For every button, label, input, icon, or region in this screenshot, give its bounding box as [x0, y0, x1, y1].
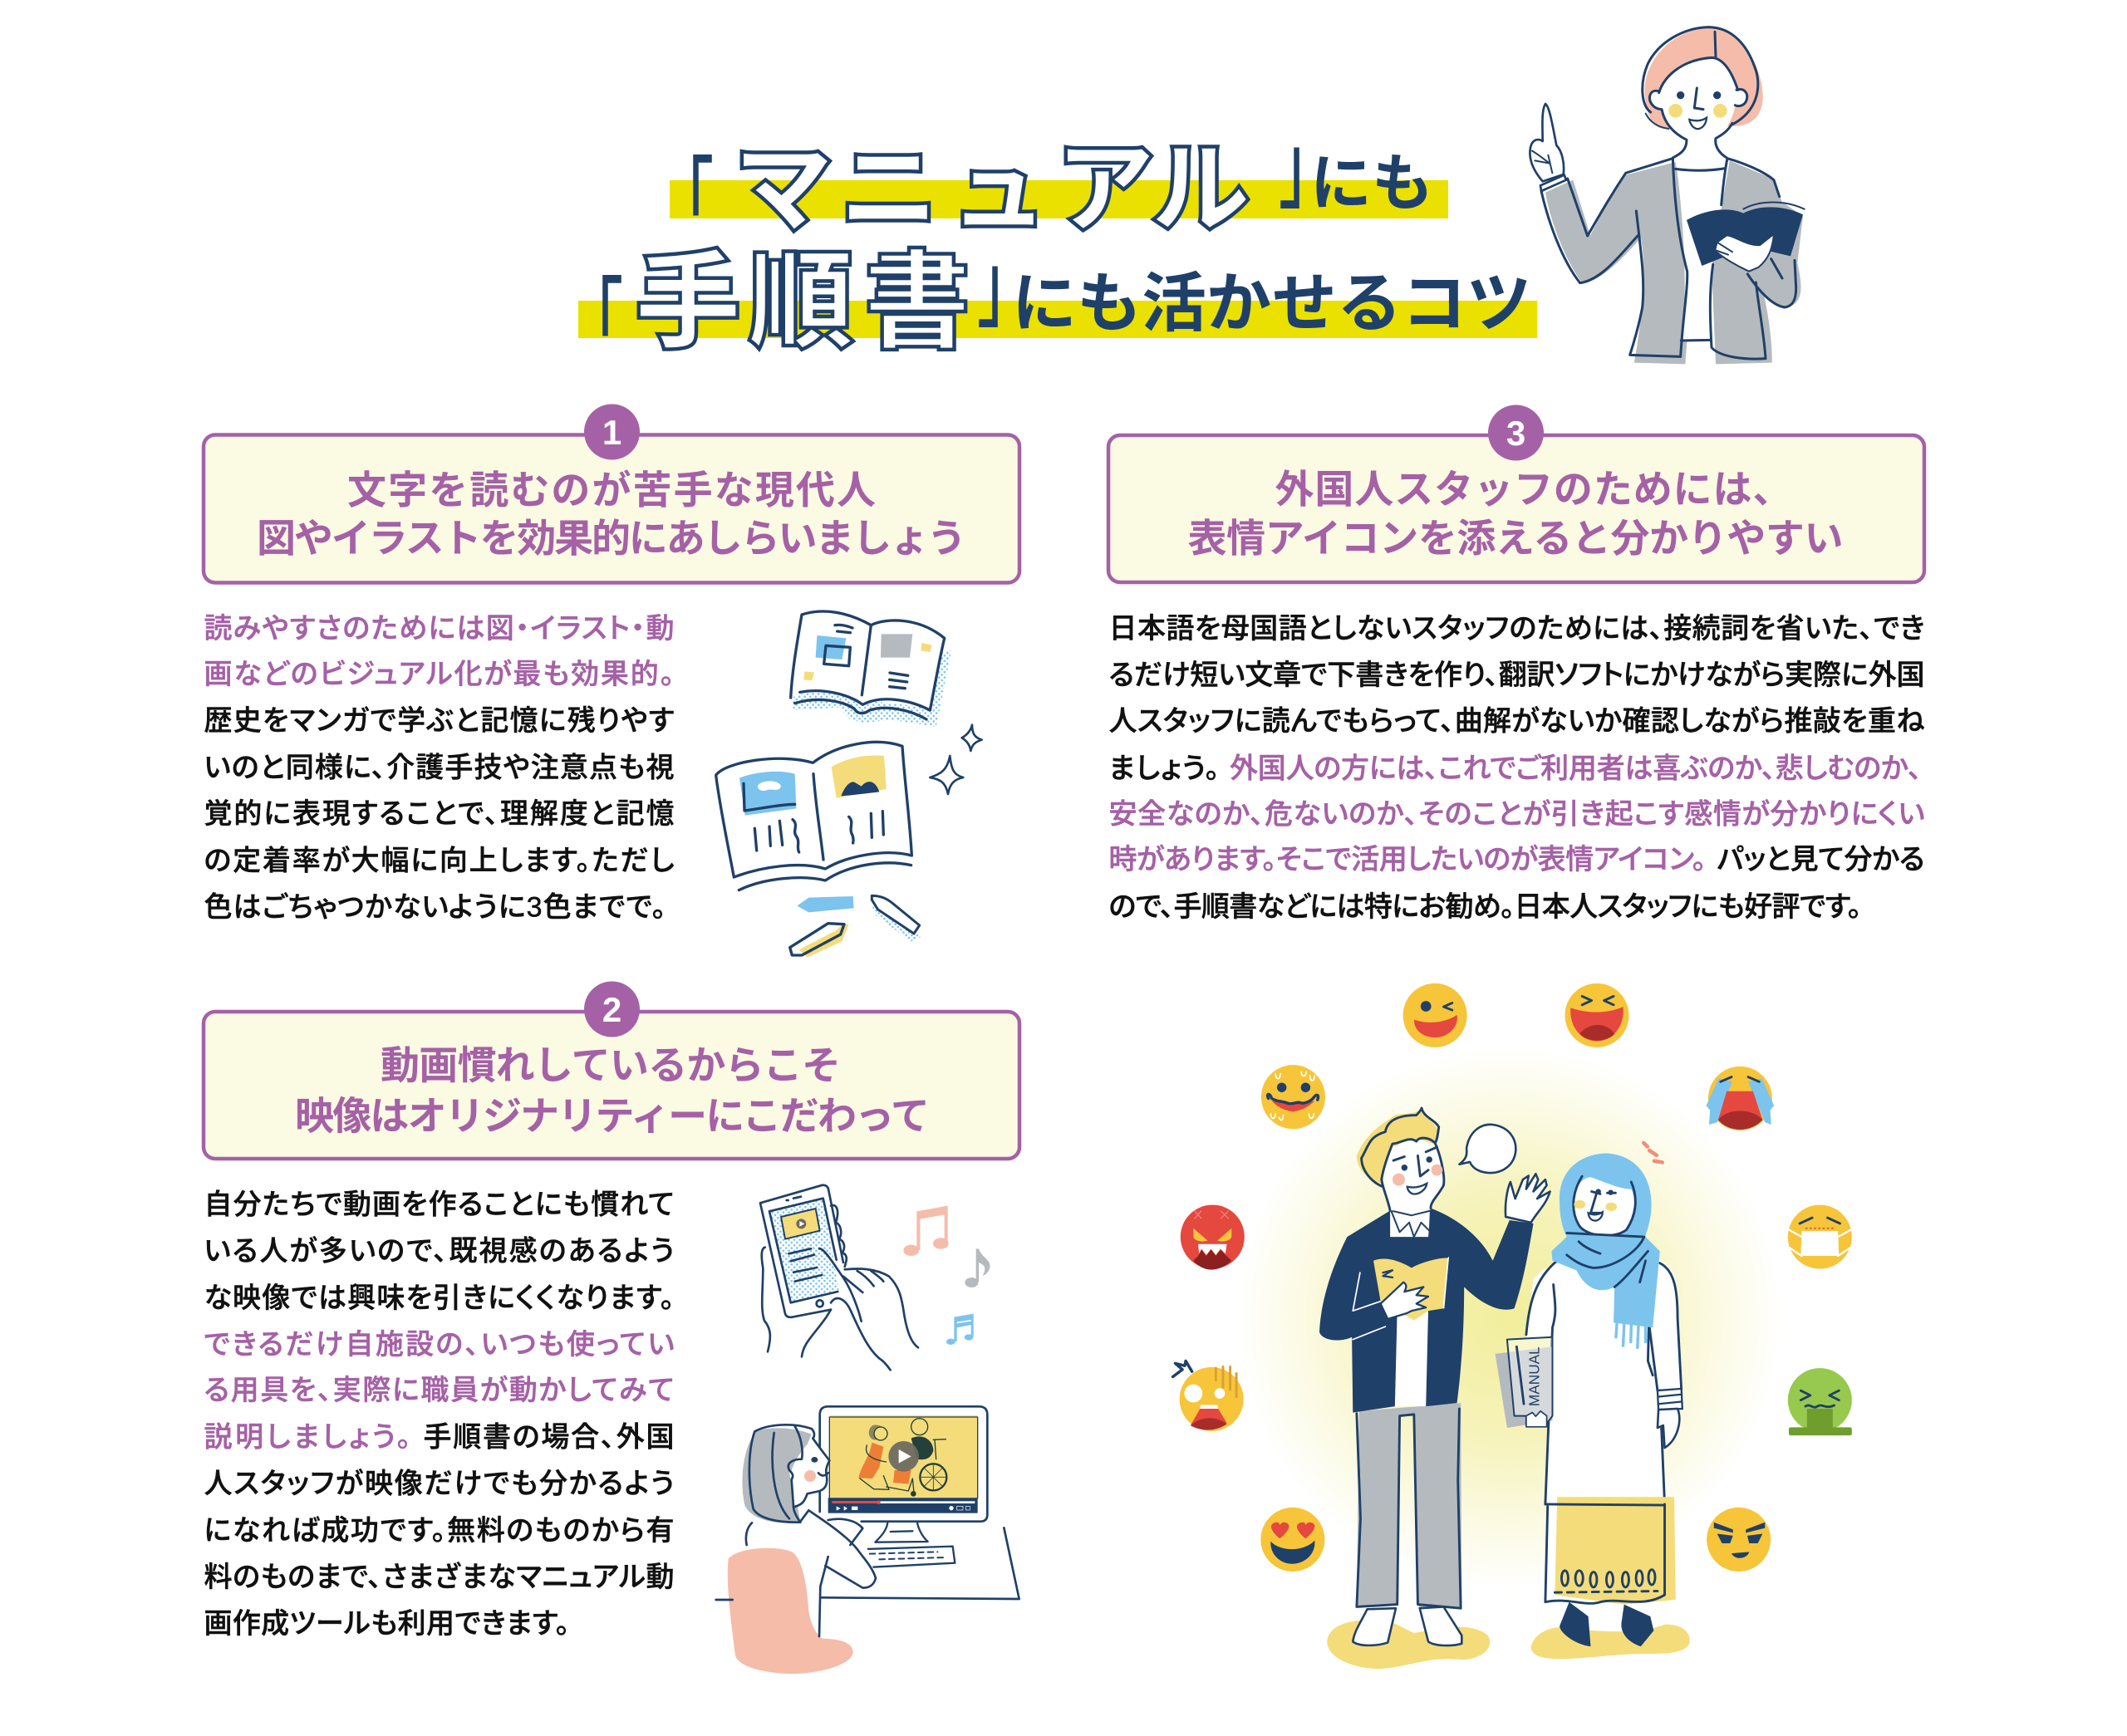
body text 2: な映像では興味を引きにくくなります。: [204, 1282, 675, 1314]
title line 1: [656, 115, 1433, 256]
man jacket: [1319, 1209, 1534, 1413]
heading 1 text: 文字を読むのが苦手な現代人: [347, 468, 876, 512]
man head: [1357, 1108, 1444, 1210]
body text 1: いのと同様に、介護手技や注意点も視: [204, 753, 675, 784]
body text 2: 料のものまで、さまざまなマニュアル動: [204, 1562, 675, 1593]
woman skirt: [1545, 1504, 1665, 1602]
title line 2: 」: [977, 234, 1035, 340]
title line 2: [565, 234, 1531, 376]
title line 2: 手順書: [635, 243, 970, 362]
sparkles: [930, 725, 982, 794]
body text 3: [1108, 613, 1925, 923]
desk: [820, 1528, 1019, 1599]
illustration: teacher holding a book: [1530, 27, 1805, 364]
title line 1: 」: [1279, 115, 1337, 221]
heading box 1: [204, 404, 1019, 583]
man shirt: [1390, 1209, 1432, 1406]
title line 2: にも活かせるコツ: [1012, 267, 1531, 340]
music notes: [903, 1206, 990, 1345]
manual booklet: [1496, 1337, 1552, 1428]
man collar: [1391, 1210, 1431, 1237]
woman scarf: [1551, 1233, 1660, 1347]
illustration: smartphone and music notes: [760, 1185, 990, 1370]
number badge 2: 2: [602, 990, 621, 1029]
woman cuff and hand: [1658, 1389, 1682, 1448]
panel 3: foreign staff: [1108, 405, 1925, 1669]
emoji: nervous sweat: [1261, 1065, 1325, 1129]
bottom book: [716, 742, 911, 890]
background glow: [1237, 1046, 1781, 1590]
body text 1: 覚的に表現することで、理解度と記憶: [204, 798, 675, 830]
number badge 1: [584, 404, 640, 460]
heading 2 text: [295, 1043, 930, 1138]
woman hijab: [1560, 1154, 1652, 1242]
body text 2: 説明しましょう。: [204, 1422, 410, 1454]
woman dress: [1526, 1261, 1682, 1504]
title line 1: にも: [1310, 149, 1433, 218]
heading box 3: [1108, 405, 1924, 582]
emoji: angry: [1181, 1205, 1245, 1270]
woman shoes: [1560, 1602, 1653, 1646]
woman: [1496, 1143, 1682, 1646]
heading 1 text: [257, 468, 966, 560]
emoji: mask: [1788, 1205, 1852, 1269]
emoji: shocked: [1173, 1361, 1244, 1431]
title line 2: 「: [565, 271, 623, 376]
person body and head: [716, 1425, 876, 1674]
illustration: staff and emotion icons: [1173, 983, 1852, 1669]
body text 2: る用具を、実際に職員が動かしてみて: [204, 1375, 675, 1406]
body text 1: 歴史をマンガで学ぶと記憶に残りやす: [204, 705, 675, 737]
body text 1: [204, 613, 675, 924]
heading box 2: [204, 982, 1019, 1159]
man book: [1373, 1255, 1448, 1321]
title highlight bar 1: [670, 180, 1448, 218]
body text 3: 時があります。そこで活用したいのが表情アイコン。: [1108, 844, 1707, 875]
body text 1: 画などのビジュアル化が最も効果的。: [204, 659, 675, 690]
keyboard: [857, 1547, 955, 1567]
man hand on book: [1381, 1282, 1428, 1319]
body text 3: るだけ短い文章で下書きを作り、翻訳ソフトにかけながら実際に外国: [1108, 660, 1924, 691]
body text 2: 手順書の場合、外国: [424, 1422, 675, 1454]
title line 1: マニュアル: [734, 134, 1250, 245]
heading 2 text: 映像はオリジナリティーにこだわって: [295, 1094, 930, 1138]
panel 2: videos: [204, 982, 1019, 1674]
emoji: crying: [1707, 1067, 1774, 1130]
body text 3: 人スタッフに読んでもらって、曲解がないか確認しながら推敲を重ね: [1108, 706, 1925, 738]
body text 3: 外国人の方には、これでご利用者は喜ぶのか、悲しむのか、: [1230, 753, 1922, 784]
title line 1: 「: [656, 150, 714, 256]
body text 2: いる人が多いので、既視感のあるよう: [204, 1236, 675, 1268]
man waving hand: [1506, 1174, 1550, 1223]
body text 1: の定着率が大幅に向上します。ただし: [204, 846, 675, 877]
manual booklet: MANUAL: [1525, 1346, 1542, 1406]
illustration: person watching video on a monitor: [716, 1406, 1019, 1674]
heading 2 text: 動画慣れしているからこそ: [381, 1043, 841, 1087]
number badge 3: 3: [1506, 414, 1525, 453]
emoji: wink: [1403, 983, 1467, 1047]
body text 1: 読みやすさのためには図・イラスト・動: [204, 613, 675, 645]
teacher jacket: [1541, 159, 1803, 364]
body text 1: 色はごちゃつかないように3色までで。: [204, 892, 666, 924]
man shoes: [1353, 1606, 1461, 1645]
monitor: [820, 1406, 987, 1542]
teacher cuff: [1540, 175, 1566, 191]
emoji: smirk: [1707, 1508, 1771, 1572]
heading 3 text: 外国人スタッフのためには、: [1275, 467, 1791, 512]
surprise marks: [1643, 1143, 1663, 1162]
emoji: heart eyes: [1260, 1508, 1324, 1572]
panel 1: visual aids: [204, 404, 1019, 958]
smartphone: [760, 1185, 918, 1370]
body text 2: 自分たちで動画を作ることにも慣れて: [204, 1189, 675, 1221]
heading 3 text: 表情アイコンを添えると分かりやすい: [1188, 517, 1843, 560]
pens: [790, 895, 921, 958]
top book: [791, 611, 951, 727]
heading 3 text: [1188, 467, 1843, 560]
body text 3: ので、手順書などには特にお勧め。日本人スタッフにも好評です。: [1108, 891, 1861, 923]
title: [565, 115, 1537, 376]
ground shadows: [1327, 1621, 1690, 1669]
teacher head: [1643, 27, 1763, 159]
video scene: caregiver and wheelchair user: [858, 1419, 946, 1497]
man: [1319, 1108, 1550, 1645]
body text 3: パッと見て分かる: [1717, 844, 1924, 875]
body text 2: 人スタッフが映像だけでも分かるよう: [204, 1469, 675, 1500]
body text 2: 画作成ツールも利用できます。: [204, 1608, 570, 1640]
body text 2: [204, 1189, 675, 1640]
number badge 2: [584, 982, 640, 1037]
title highlight bar 2: [578, 301, 1537, 338]
speech bubble: [1459, 1125, 1515, 1173]
body text 2: できるだけ自施設の、いつも使ってい: [204, 1329, 675, 1361]
teacher open book: [1687, 203, 1805, 272]
emoji: sick: [1788, 1368, 1852, 1435]
number badge 1: 1: [602, 413, 621, 452]
man trousers: [1357, 1403, 1461, 1608]
emoji: laughing: [1565, 983, 1628, 1047]
teacher hand pointing: [1530, 104, 1564, 181]
body text 3: ましょう。: [1108, 753, 1220, 784]
body text 3: 日本語を母国語としないスタッフのためには、接続詞を省いた、でき: [1108, 613, 1924, 645]
number badge 3: [1488, 405, 1544, 460]
illustration: books and pens: [716, 611, 982, 958]
heading 1 text: 図やイラストを効果的にあしらいましょう: [257, 517, 966, 560]
body text 3: 安全なのか、危ないのか、そのことが引き起こす感情が分かりにくい: [1108, 799, 1924, 831]
body text 2: になれば成功です。無料のものから有: [204, 1515, 675, 1547]
